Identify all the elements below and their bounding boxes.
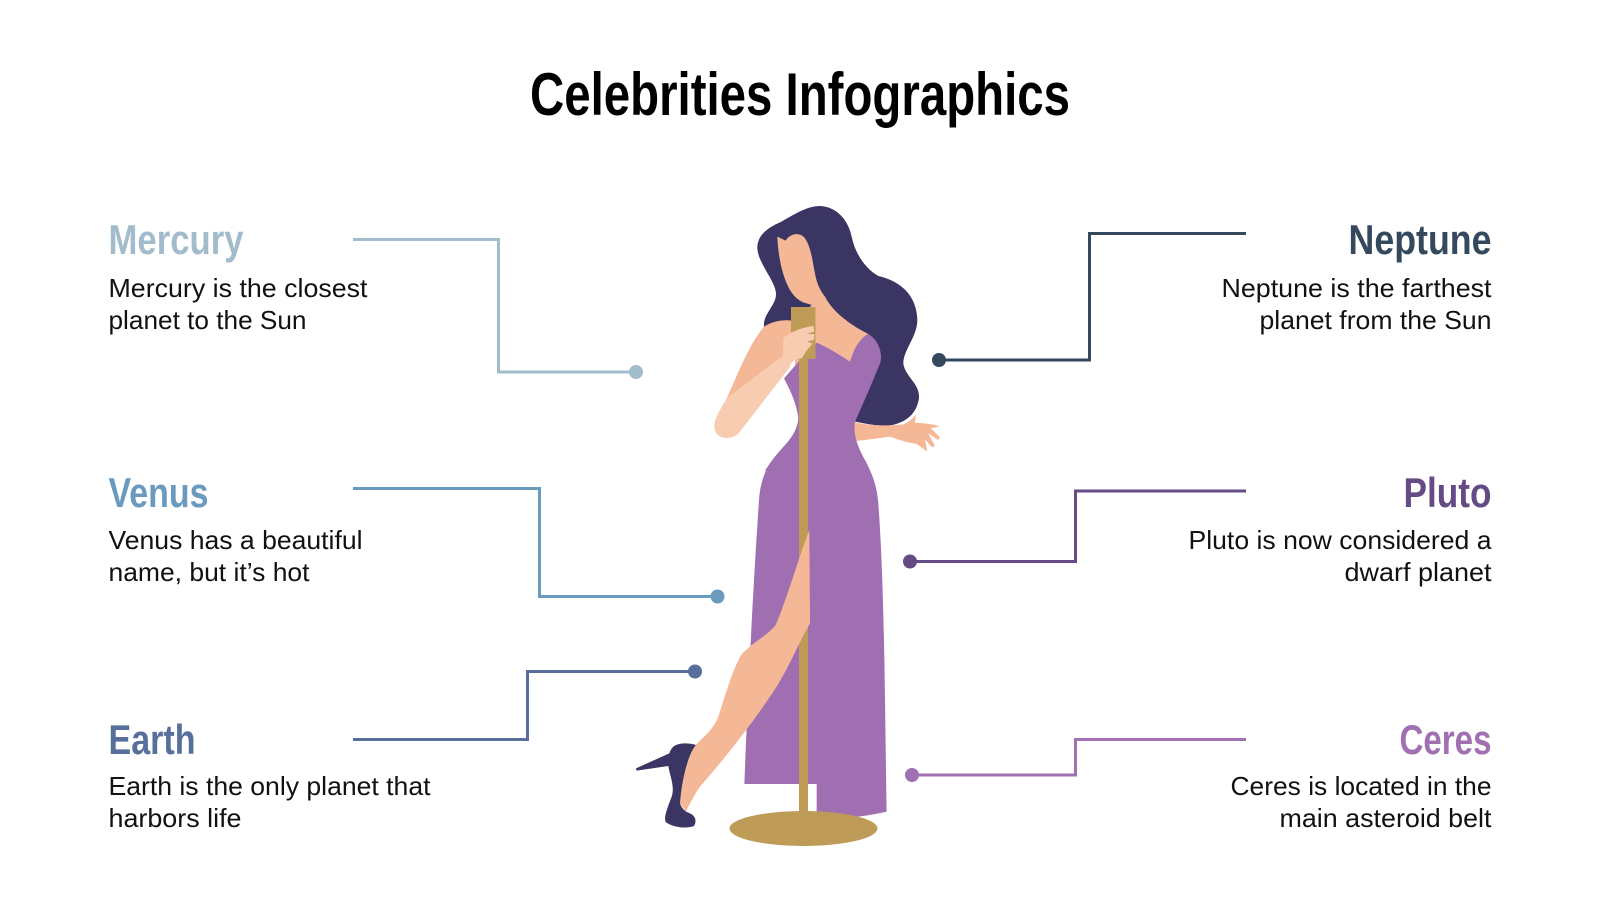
text block: Pluto: Pluto	[1404, 469, 1492, 516]
connector: Venus	[353, 488, 724, 604]
text block: Earth: Earth is the only planet that	[108, 771, 431, 801]
text block: Ceres	[1230, 716, 1492, 833]
connector: Earth	[353, 664, 702, 740]
illustration: singer with microphone	[636, 206, 940, 846]
text block: Mercury	[108, 216, 368, 335]
back arm and hand	[852, 414, 940, 452]
microphone stand pole and base	[730, 307, 878, 846]
connector: Ceres	[905, 740, 1246, 782]
title: Celebrities Infographics	[530, 61, 1070, 128]
connector: Neptune	[932, 234, 1246, 367]
connector: Mercury	[353, 240, 643, 379]
text block: Venus: name, but it’s hot	[108, 557, 310, 587]
dress	[744, 334, 887, 817]
text block: Pluto: dwarf planet	[1344, 557, 1492, 587]
shoulder and upper arm	[722, 320, 793, 408]
text block: Mercury: Mercury	[108, 216, 244, 263]
connector: Pluto	[903, 491, 1246, 568]
text block: Earth: harbors life	[108, 803, 242, 833]
face, neck and chest	[777, 234, 868, 372]
text block: Mercury: Mercury is the closest	[108, 273, 368, 303]
hair	[757, 206, 919, 426]
forearm and hand on microphone	[714, 326, 815, 438]
text block: Mercury: planet to the Sun	[108, 305, 306, 335]
text block: Earth	[108, 716, 431, 833]
text block: Neptune: Neptune is the farthest	[1222, 273, 1492, 303]
text block: Venus	[108, 469, 362, 587]
text block: Ceres: Ceres is located in the	[1230, 771, 1492, 801]
high-heel shoe	[636, 743, 696, 827]
text block: Neptune	[1222, 216, 1492, 335]
text block: Pluto: Pluto is now considered a	[1188, 525, 1492, 555]
text block: Venus: Venus has a beautiful	[108, 525, 362, 555]
text block: Ceres: Ceres	[1400, 716, 1492, 763]
text block: Neptune: Neptune	[1348, 216, 1492, 263]
text block: Neptune: planet from the Sun	[1260, 305, 1492, 335]
text block: Earth: Earth	[108, 716, 196, 763]
raised leg	[680, 530, 810, 812]
text block: Pluto	[1188, 469, 1492, 587]
text block: Ceres: main asteroid belt	[1280, 803, 1492, 833]
text block: Venus: Venus	[108, 469, 208, 516]
